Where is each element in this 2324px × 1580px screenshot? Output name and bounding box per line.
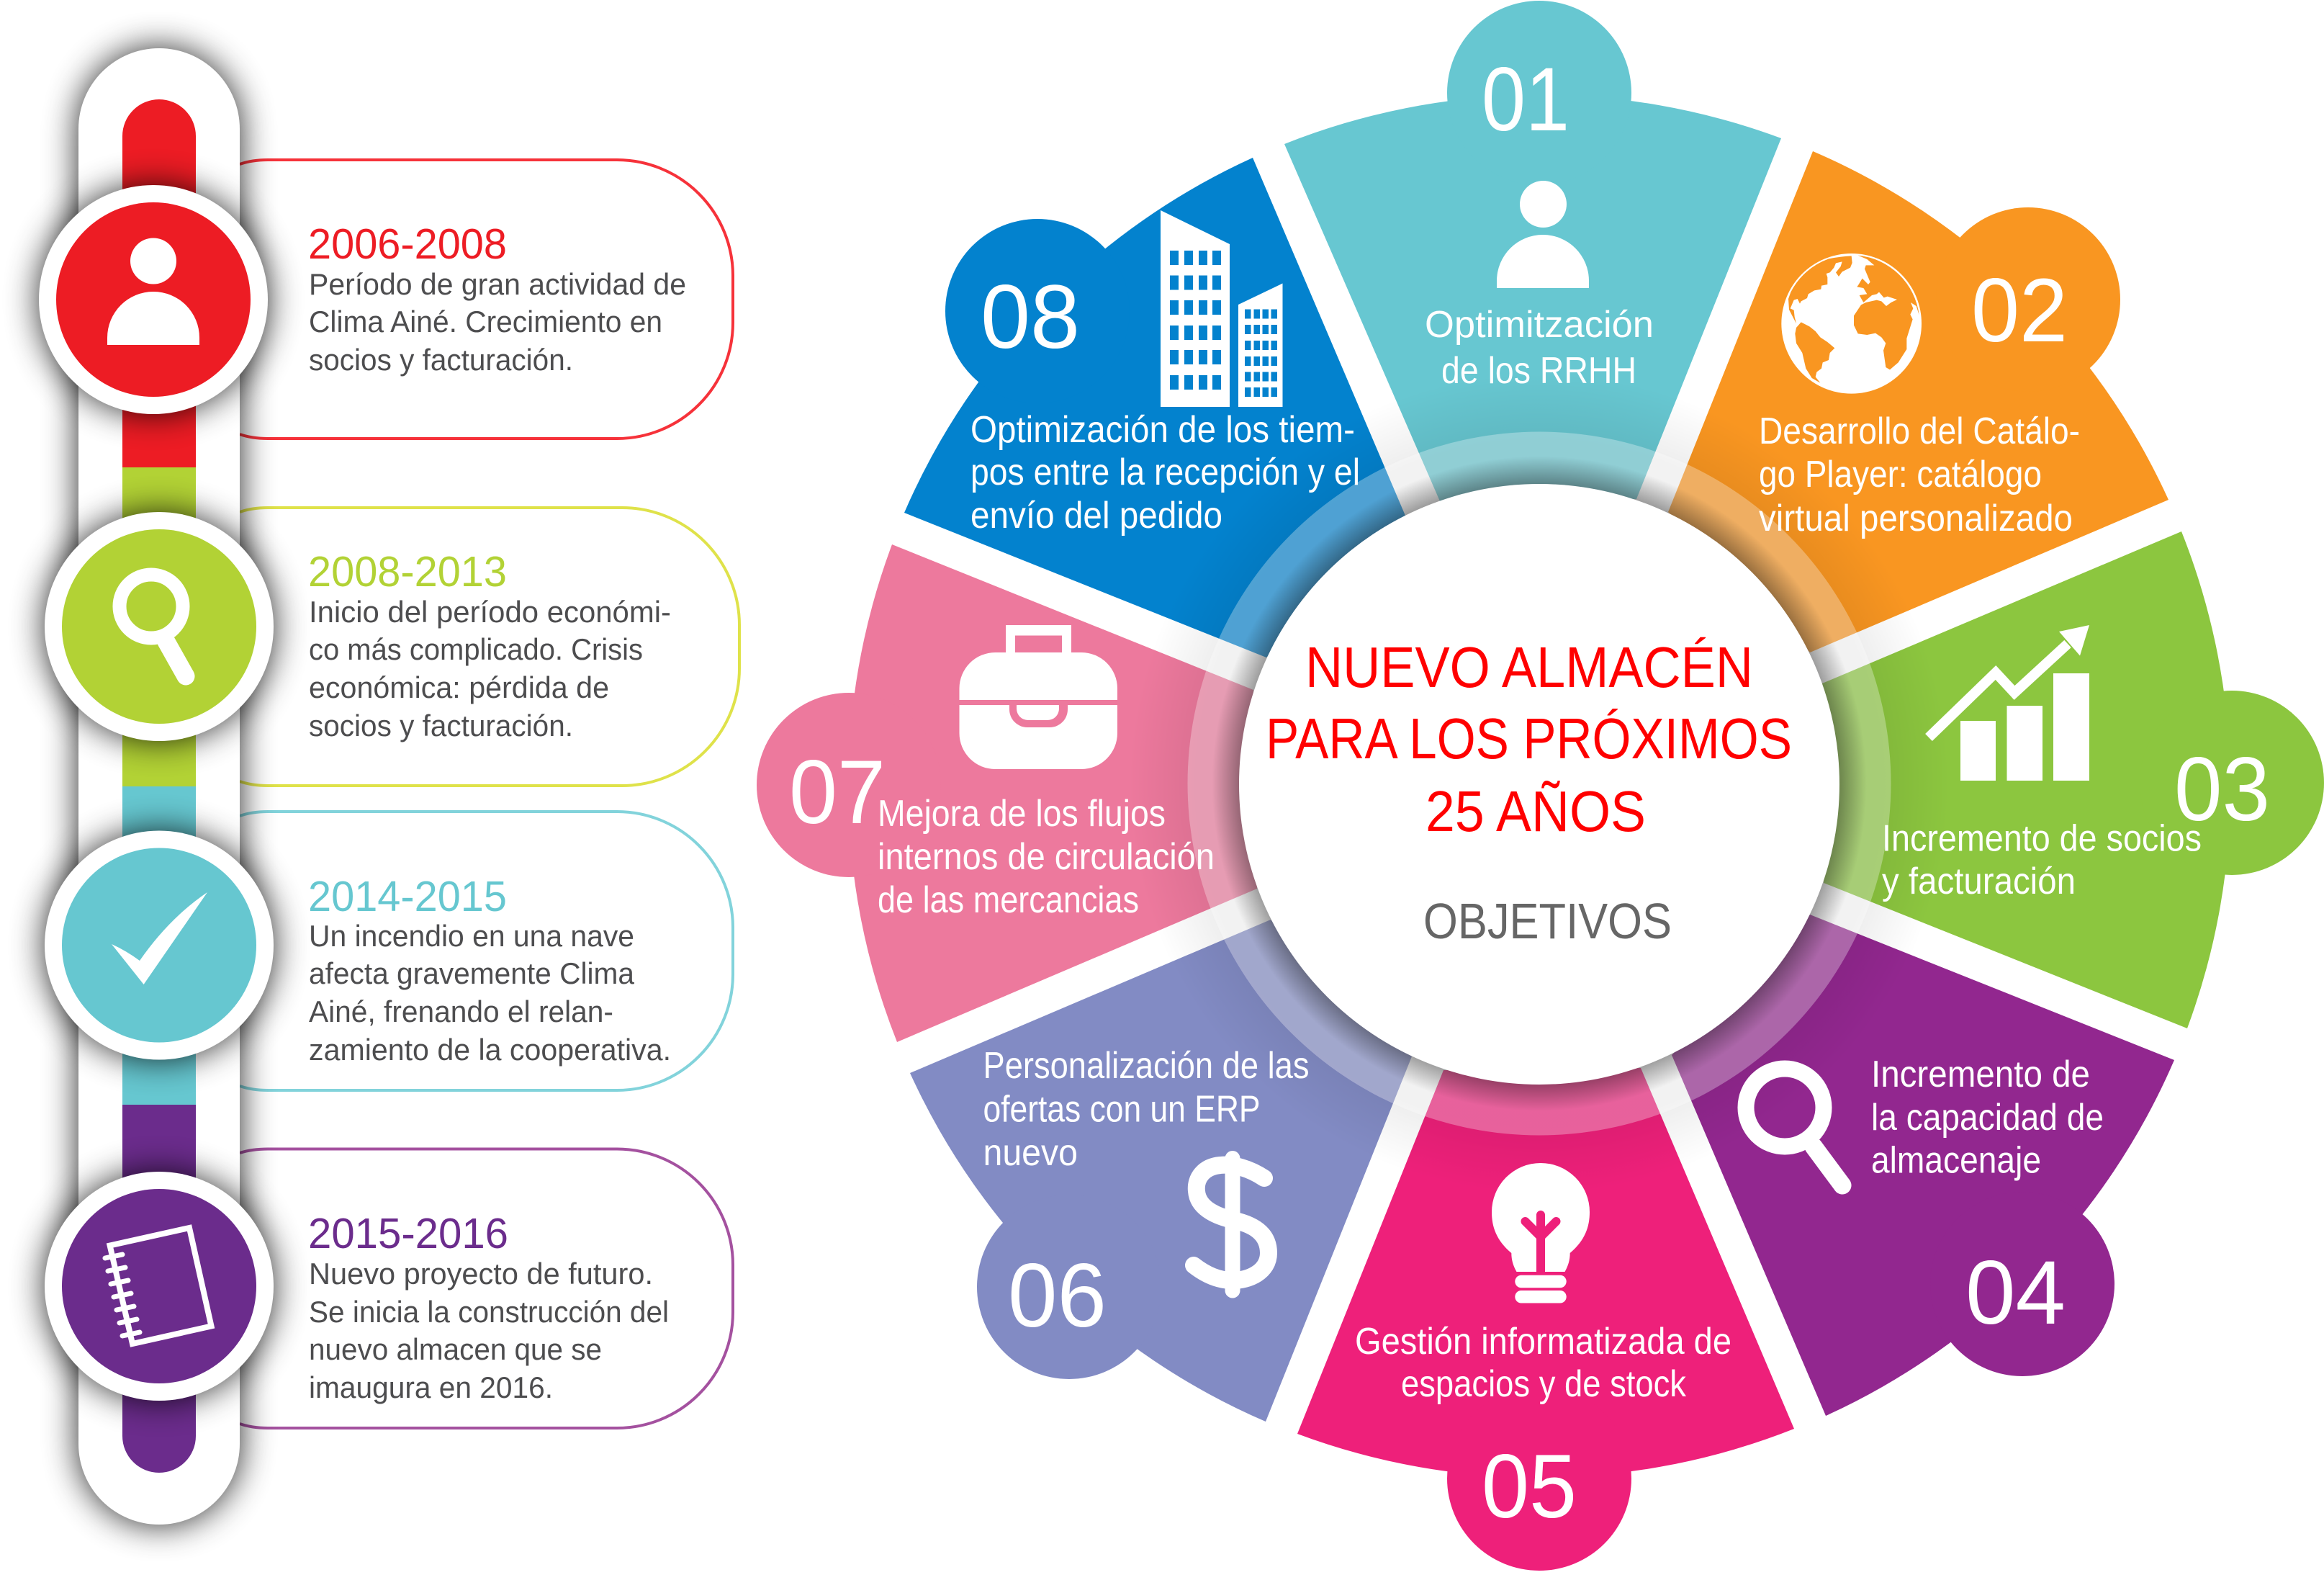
timeline marker 4: notebook bbox=[45, 1172, 274, 1401]
icon: dollar sign bbox=[1194, 1158, 1269, 1291]
icon: check mark bbox=[112, 892, 207, 984]
label 02: Desarrollo del Catálo- bbox=[1759, 410, 2080, 452]
timeline text 2006-2008: Clima Ainé. Crecimiento en bbox=[309, 305, 662, 338]
timeline text 2006-2008: 2006-2008 bbox=[308, 220, 507, 268]
label 07: Mejora de los flujos bbox=[878, 793, 1166, 835]
segment 04 content bbox=[1746, 1054, 2104, 1343]
wheel segment 05 bbox=[1297, 1068, 1794, 1571]
icon: person bbox=[107, 238, 199, 345]
label 07 bbox=[878, 793, 1215, 921]
timeline text 2008-2013: socios y facturación. bbox=[309, 709, 573, 742]
timeline text 2006-2008: socios y facturación. bbox=[309, 343, 573, 377]
center title: PARA LOS PRÓXIMOS bbox=[1266, 706, 1792, 771]
label 08: pos entre la recepción y el bbox=[970, 452, 1360, 493]
number 08: 08 bbox=[981, 267, 1080, 367]
wheel segment 07 bbox=[757, 544, 1257, 1042]
timeline text 2014-2015: Un incendio en una nave bbox=[309, 919, 634, 953]
label 06: nuevo bbox=[983, 1132, 1078, 1174]
segment 02 content bbox=[1759, 253, 2080, 539]
timeline text 2008-2013: económica: pérdida de bbox=[309, 670, 609, 704]
center subtitle: OBJETIVOS bbox=[1423, 893, 1672, 949]
timeline text 2014-2015: 2014-2015 bbox=[308, 873, 507, 920]
segment 05 content bbox=[1355, 1163, 1731, 1537]
translucent ring bbox=[1187, 431, 1891, 1136]
timeline text 2006-2008: Período de gran actividad de bbox=[309, 267, 686, 301]
label 08: envío del pedido bbox=[970, 495, 1222, 537]
timeline text 2006-2008 bbox=[308, 220, 686, 377]
number 05: 05 bbox=[1482, 1437, 1577, 1537]
label 04: Incremento de bbox=[1871, 1054, 2090, 1095]
timeline text 2014-2015: afecta gravemente Clima bbox=[309, 956, 635, 990]
callout outline 2008-2013 bbox=[240, 508, 739, 786]
timeline colour bar bbox=[122, 99, 196, 1473]
timeline text 2008-2013: co más complicado. Crisis bbox=[309, 632, 643, 666]
label 06: Personalización de las bbox=[983, 1045, 1309, 1087]
center title: NUEVO ALMACÉN bbox=[1305, 635, 1753, 699]
label 07: internos de circulación bbox=[878, 836, 1215, 878]
icon: growth chart bbox=[1929, 625, 2089, 781]
timeline text 2008-2013 bbox=[308, 548, 671, 742]
segment 08 content bbox=[970, 210, 1360, 537]
segment 03 content bbox=[1882, 625, 2270, 902]
timeline text 2015-2016: imaugura en 2016. bbox=[309, 1370, 553, 1404]
icon: notebook bbox=[105, 1228, 212, 1344]
number 02: 02 bbox=[1971, 261, 2068, 361]
callout outline 2006-2008 bbox=[240, 160, 733, 439]
label 05 bbox=[1355, 1321, 1731, 1405]
icon: magnifier bbox=[120, 575, 186, 676]
label 01: Optimitzación bbox=[1425, 304, 1654, 346]
label 06: ofertas con un ERP bbox=[983, 1089, 1260, 1131]
center title bbox=[1266, 635, 1792, 843]
number 03: 03 bbox=[2174, 740, 2270, 840]
callout outline 2015-2016 bbox=[240, 1149, 733, 1428]
timeline text 2014-2015: zamiento de la cooperativa. bbox=[309, 1033, 671, 1067]
label 08 bbox=[970, 409, 1360, 537]
timeline text 2008-2013: 2008-2013 bbox=[308, 548, 507, 596]
segment 01 content bbox=[1425, 50, 1654, 392]
number 06: 06 bbox=[1008, 1246, 1107, 1346]
wheel segment 03 bbox=[1822, 531, 2324, 1028]
timeline text 2015-2016: Nuevo proyecto de futuro. bbox=[309, 1257, 653, 1291]
wheel segment 04 bbox=[1672, 915, 2174, 1416]
timeline capsule bbox=[78, 48, 240, 1525]
timeline text 2015-2016: Se inicia la construcción del bbox=[309, 1295, 669, 1329]
number 01: 01 bbox=[1482, 50, 1569, 150]
label 05: Gestión informatizada de bbox=[1355, 1321, 1731, 1363]
timeline text 2015-2016 bbox=[308, 1210, 669, 1404]
callout outline 2014-2015 bbox=[240, 812, 733, 1090]
capsule body bbox=[78, 48, 240, 1525]
timeline text 2014-2015 bbox=[308, 873, 671, 1067]
center title: 25 AÑOS bbox=[1426, 779, 1646, 843]
label 04: la capacidad de bbox=[1871, 1097, 2104, 1139]
outer soft shade bbox=[1129, 373, 1950, 1194]
icon: buildings bbox=[1161, 210, 1283, 407]
segment 07 content bbox=[789, 625, 1215, 921]
timeline text 2014-2015: Ainé, frenando el relan- bbox=[309, 995, 613, 1028]
icon: globe bbox=[1781, 253, 1922, 394]
label 02 bbox=[1759, 410, 2080, 539]
icon: light bulb bbox=[1492, 1163, 1590, 1303]
label 03 bbox=[1882, 818, 2202, 902]
label 02: go Player: catálogo bbox=[1759, 454, 2042, 495]
label 04 bbox=[1871, 1054, 2104, 1181]
wheel segment 01 bbox=[1284, 1, 1781, 501]
wheel segment 08 bbox=[904, 158, 1405, 657]
label 08: Optimización de los tiem- bbox=[970, 409, 1355, 451]
timeline marker 1: person bbox=[39, 185, 268, 414]
wheel segment 02 bbox=[1668, 151, 2168, 652]
timeline text 2008-2013: Inicio del período económi- bbox=[309, 595, 671, 629]
number 04: 04 bbox=[1965, 1243, 2066, 1343]
label 04: almacenaje bbox=[1871, 1139, 2041, 1181]
label 07: de las mercancias bbox=[878, 879, 1139, 921]
label 03: y facturación bbox=[1882, 861, 2076, 902]
center circle bbox=[1239, 484, 1839, 1085]
timeline marker 2: magnifier bbox=[45, 512, 274, 741]
label 05: espacios y de stock bbox=[1401, 1363, 1687, 1405]
timeline marker 3: check bbox=[45, 831, 274, 1060]
label 01: de los RRHH bbox=[1441, 350, 1636, 392]
label 02: virtual personalizado bbox=[1759, 498, 2073, 539]
label 06 bbox=[983, 1045, 1309, 1174]
icon: briefcase bbox=[959, 625, 1117, 769]
label 01 bbox=[1425, 304, 1654, 392]
icon: magnifier bbox=[1746, 1069, 1842, 1185]
timeline text 2015-2016: nuevo almacen que se bbox=[309, 1332, 602, 1366]
segment 06 content bbox=[983, 1045, 1309, 1346]
timeline callouts outlines bbox=[240, 160, 739, 1428]
icon: person bbox=[1497, 181, 1589, 288]
capsule shadow bbox=[78, 48, 240, 1525]
timeline text 2015-2016: 2015-2016 bbox=[308, 1210, 508, 1257]
wheel segment 06 bbox=[910, 920, 1412, 1422]
number 07: 07 bbox=[789, 742, 886, 843]
label 03: Incremento de socios bbox=[1882, 818, 2202, 860]
